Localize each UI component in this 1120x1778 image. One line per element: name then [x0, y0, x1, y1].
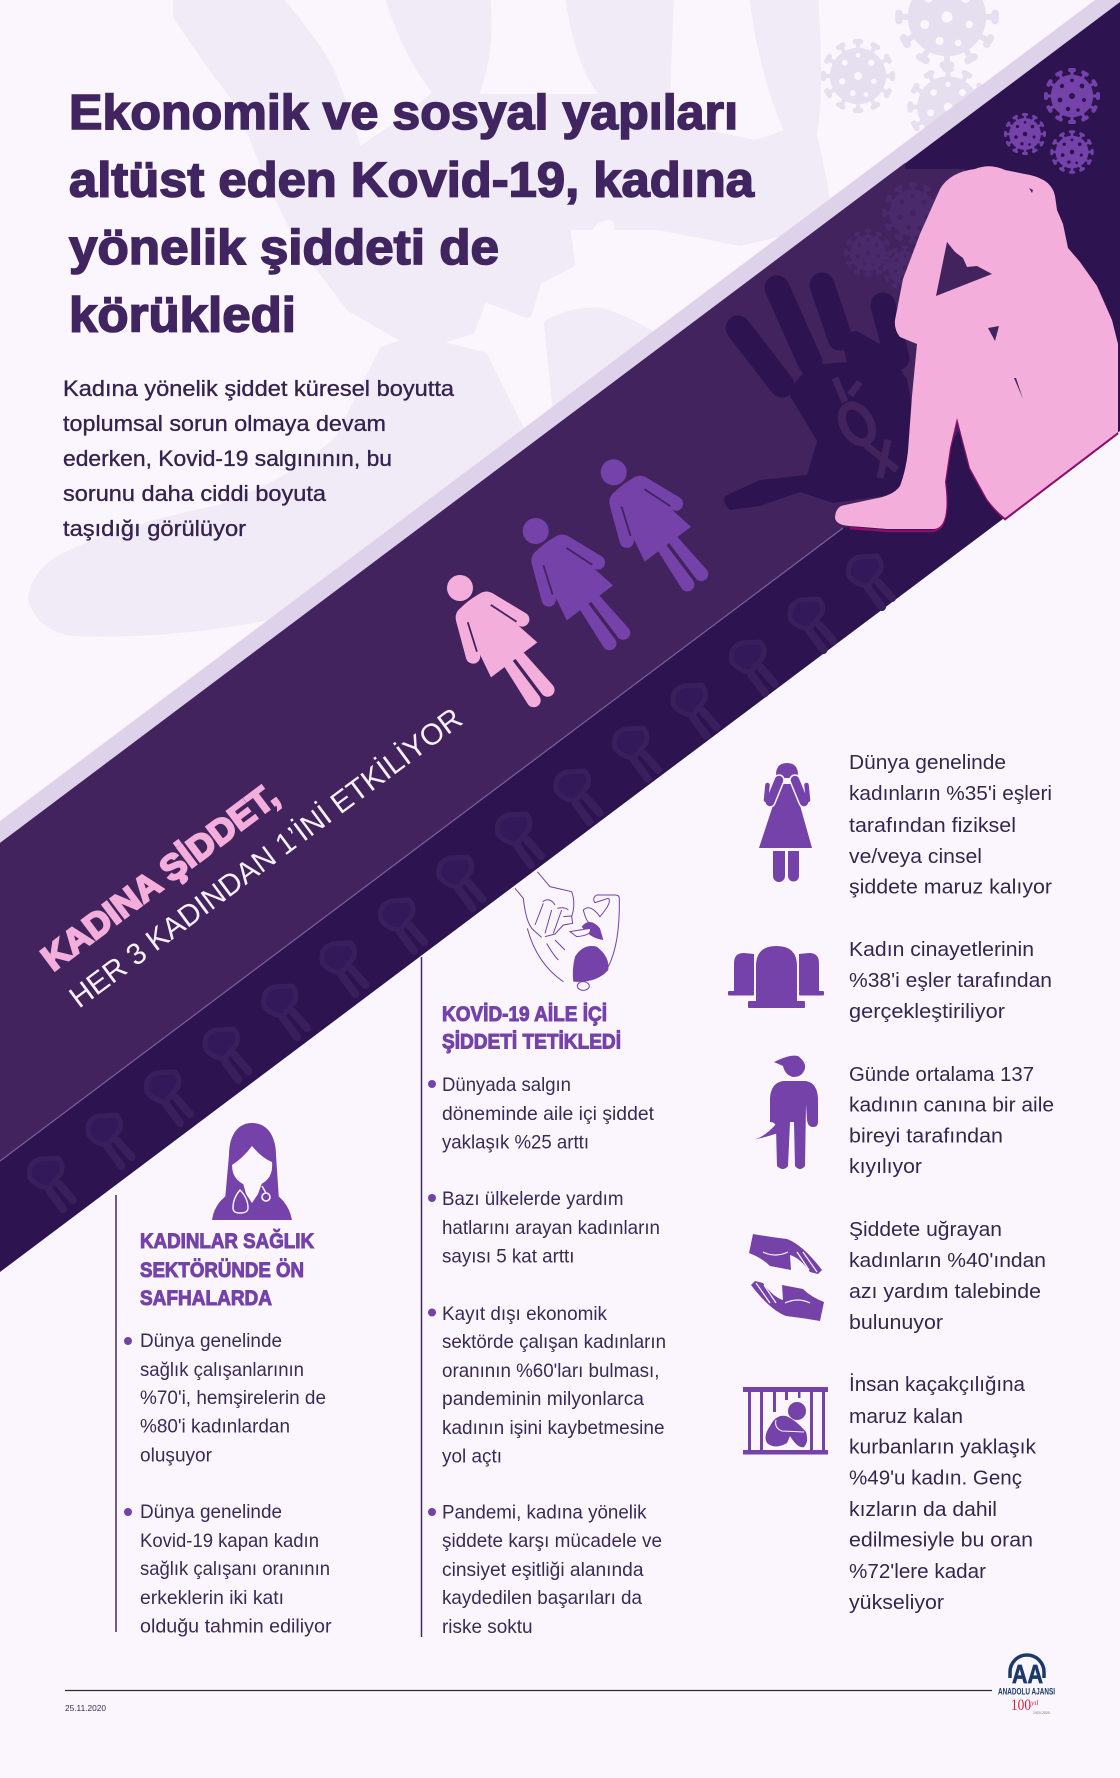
text: trafficking: kızların da dahil: [849, 1498, 997, 1521]
intro paragraph: Kadına yönelik şiddet küresel boyutta: [63, 376, 455, 401]
text: physical violence: [849, 751, 1052, 898]
bullet list: health sector: sağlık çalışanlarının: [140, 1359, 304, 1381]
purple virus small left: [1004, 113, 1046, 155]
Anadolu Agency logo: ANADOLU AJANSI: [998, 1686, 1055, 1698]
text: trafficking: [849, 1373, 1037, 1614]
bullet list: domestic violence: sayısı 5 kat arttı: [442, 1246, 574, 1268]
title: yönelik şiddeti de: [69, 221, 499, 275]
bullet list: domestic violence: oranının %60'ları bulması,: [442, 1360, 660, 1382]
band subheading rotated: HER 3 KADINDAN 1’İNİ ETKİLİYOR: [63, 702, 469, 1015]
Anadolu Agency logo: [998, 1655, 1055, 1715]
column divider left: [115, 1195, 117, 1632]
bullet list: domestic violence: cinsiyet eşitliği alanında: [442, 1559, 644, 1581]
bullet list: domestic violence: riske soktu: [442, 1616, 532, 1638]
text: killed daily: kadının canına bir aile: [849, 1094, 1054, 1116]
icon: fist and crouching woman: [515, 872, 619, 990]
bullet list: health sector: olduğu tahmin ediliyor: [140, 1616, 332, 1638]
text: femicide: [849, 938, 1052, 1023]
intro paragraph: toplumsal sorun olmaya devam: [63, 411, 386, 436]
text: trafficking: %72'lere kadar: [849, 1560, 986, 1583]
bullet list: health sector: %80'i kadınlardan: [140, 1416, 290, 1438]
three women icons: 1 of 3 affected: [422, 439, 729, 723]
heading: health sector: SAFHALARDA: [140, 1286, 272, 1310]
text: trafficking: yükseliyor: [849, 1591, 944, 1614]
diagonal band divider line: [0, 528, 843, 1161]
bullet list: health sector: [124, 1330, 332, 1638]
bullet list: health sector: sağlık çalışanı oranının: [140, 1558, 330, 1580]
heading: domestic violence: ŞİDDETİ TETİKLEDİ: [442, 1030, 621, 1054]
bullet list: domestic violence: pandeminin milyonlarca: [442, 1388, 644, 1410]
intro paragraph: sorunu daha ciddi boyuta: [63, 481, 327, 506]
bullet list: health sector: erkeklerin iki katı: [140, 1587, 284, 1609]
heading: health sector: KADINLAR SAĞLIK: [140, 1228, 314, 1253]
lavender diagonal stripe: [0, 0, 1120, 843]
intro paragraph: ederken, Kovid-19 salgınının, bu: [63, 446, 392, 471]
intro paragraph: [63, 376, 455, 541]
title: altüst eden Kovid-19, kadına: [69, 154, 755, 208]
text: seeking help: bulunuyor: [849, 1311, 943, 1334]
text: killed daily: [849, 1063, 1054, 1178]
text: killed daily: bireyi tarafından: [849, 1124, 1003, 1148]
text: trafficking: İnsan kaçakçılığına: [849, 1373, 1026, 1396]
Anadolu Agency logo: AA: [1012, 1659, 1043, 1689]
text: seeking help: [849, 1218, 1046, 1334]
text: femicide: %38'i eşler tarafından: [849, 969, 1052, 992]
Anadolu Agency logo: 1920-2020: [1033, 1711, 1050, 1715]
pale virus: top right: [895, 0, 999, 69]
bullet list: health sector: Kovid-19 kapan kadın: [140, 1530, 319, 1552]
title: körükledi: [69, 288, 296, 342]
bullet list: domestic violence: Bazı ülkelerde yardım: [442, 1188, 624, 1210]
bullet list: health sector: oluşuyor: [140, 1444, 212, 1466]
icon: crying woman: [759, 763, 812, 882]
text: physical violence: şiddete maruz kalıyor: [849, 876, 1052, 898]
bullet list: domestic violence: Pandemi, kadına yönelik: [442, 1502, 647, 1524]
title: Ekonomik ve sosyal yapıları: [69, 86, 738, 140]
diagonal band: dark: [0, 2, 1120, 1272]
intro paragraph: taşıdığı görülüyor: [63, 516, 246, 541]
pale virus: left: [821, 39, 895, 113]
bullet list: domestic violence: Kayıt dışı ekonomik: [442, 1303, 607, 1325]
icon: man with knife: [753, 1056, 818, 1169]
pale virus: crossing the stripe: [907, 66, 989, 148]
pink seated woman silhouette: [835, 166, 1118, 531]
bullet list: domestic violence: kaydedilen başarıları da: [442, 1587, 642, 1609]
faint small virus on band: [844, 229, 892, 277]
Anadolu Agency logo: 100: [1011, 1697, 1031, 1714]
bullet list: domestic violence: şiddete karşı mücadele ve: [442, 1530, 662, 1552]
text: trafficking: kurbanların yaklaşık: [849, 1436, 1037, 1459]
heading: health sector: [140, 1228, 314, 1310]
bullet list: health sector: %70'i, hemşirelerin de: [140, 1387, 326, 1409]
text: trafficking: %49'u kadın. Genç: [849, 1466, 1022, 1490]
icon: child behind bars: [743, 1387, 828, 1454]
pale hand print background: [33, 0, 828, 632]
text: physical violence: kadınların %35'i eşleri: [849, 782, 1052, 805]
heading: domestic violence: KOVİD-19 AİLE İÇİ: [442, 1002, 607, 1026]
text: killed daily: kıyılıyor: [849, 1155, 922, 1178]
bullet list: domestic violence: [428, 1074, 666, 1638]
text: seeking help: Şiddete uğrayan: [849, 1218, 1002, 1241]
text: trafficking: edilmesiyle bu oran: [849, 1528, 1033, 1552]
text: trafficking: maruz kalan: [849, 1405, 963, 1428]
bullet list: health sector: Dünya genelinde: [140, 1330, 282, 1352]
text: seeking help: azı yardım talebinde: [849, 1280, 1041, 1303]
bullet list: domestic violence: döneminde aile içi şiddet: [442, 1103, 655, 1125]
faint virus on band: [882, 182, 944, 244]
footer rule: [65, 1690, 992, 1692]
text: physical violence: Dünya genelinde: [849, 751, 1006, 774]
dark hand print with gender symbol: [724, 285, 925, 510]
text: physical violence: tarafından fiziksel: [849, 814, 1016, 837]
bullet list: domestic violence: yol açtı: [442, 1446, 502, 1468]
bullet list: health sector: Dünya genelinde: [140, 1501, 282, 1523]
purple virus large: [1044, 68, 1100, 124]
text: seeking help: kadınların %40'ından: [849, 1249, 1046, 1272]
Anadolu Agency logo: yıl: [1030, 1698, 1038, 1707]
bullet list: domestic violence: yaklaşık %25 arttı: [442, 1132, 589, 1154]
bullet list: domestic violence: kadının işini kaybetmesine: [442, 1417, 664, 1439]
diagonal band: mid purple: [0, 163, 965, 1161]
text: femicide: gerçekleştiriliyor: [849, 1000, 1005, 1023]
icon: female doctor: [212, 1123, 292, 1220]
title: [69, 86, 755, 342]
bullet list: domestic violence: sektörde çalışan kadınların: [442, 1331, 666, 1353]
date: 25.11.2020: [65, 1703, 106, 1713]
strip of crouching woman icons: [29, 556, 892, 1209]
icon: gravestones: [728, 946, 824, 1008]
text: killed daily: Günde ortalama 137: [849, 1063, 1034, 1086]
column divider middle: [420, 957, 422, 1637]
icon: helping hands: [749, 1234, 824, 1321]
faint virus beside arm: [883, 246, 927, 290]
bullet list: domestic violence: hatlarını arayan kadınların: [442, 1217, 660, 1239]
bullet list: domestic violence: Dünyada salgın: [442, 1074, 571, 1096]
heading: health sector: SEKTÖRÜNDE ÖN: [140, 1257, 304, 1282]
text: physical violence: ve/veya cinsel: [849, 845, 982, 868]
purple virus small right: [1050, 130, 1094, 174]
text: femicide: Kadın cinayetlerinin: [849, 938, 1034, 961]
heading: domestic violence: [442, 1002, 621, 1054]
band heading rotated: KADINA ŞİDDET,: [34, 776, 286, 978]
